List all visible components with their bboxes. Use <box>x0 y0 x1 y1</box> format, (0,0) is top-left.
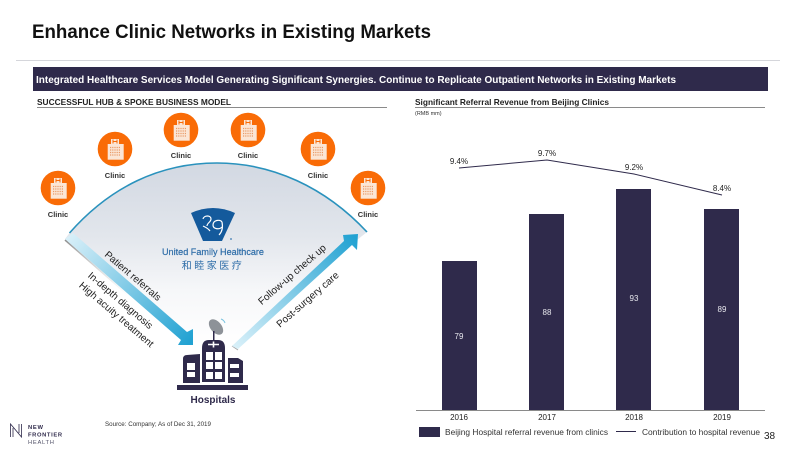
label: post-surgery care: Post-surgery care <box>275 270 342 330</box>
clinic 3: Clinic <box>171 151 191 160</box>
clinic 5: Clinic <box>308 171 328 180</box>
clinic 4: Clinic <box>238 151 258 160</box>
logo: New Frontier Health: NEW <box>28 425 44 431</box>
clinic 1 <box>41 171 75 219</box>
logo: New Frontier Health <box>10 424 63 446</box>
fan sector <box>65 163 367 349</box>
title: Enhance Clinic Networks in Existing Markets <box>32 22 431 43</box>
label: hospitals: Hospitals <box>190 395 236 406</box>
banner: Integrated Healthcare Services Model Generating Significant Synergies. Continue to Replicate Outpatient Networks in Existing Markets <box>36 74 676 86</box>
panel: referral revenue chart <box>415 97 765 437</box>
clinic 4 <box>231 113 265 160</box>
arc <box>70 163 367 233</box>
unit note: (RMB mm) <box>415 111 442 117</box>
line chart: contribution to hospital revenue: 9.7% <box>538 149 556 158</box>
banner <box>33 67 768 91</box>
logo: United Family Healthcare <box>162 208 264 272</box>
bar chart: 2018 <box>625 413 643 422</box>
page number: 38 <box>764 431 776 442</box>
line chart: contribution to hospital revenue: 9.2% <box>625 163 643 172</box>
line chart: contribution to hospital revenue: 8.4% <box>713 184 731 193</box>
logo: New Frontier Health: HEALTH <box>28 440 55 446</box>
logo: United Family Healthcare: 和睦家医疗 <box>182 259 244 272</box>
bar chart: 79 <box>455 332 464 341</box>
clinic 2 <box>98 132 132 180</box>
bar chart: 2017 <box>538 413 556 422</box>
arrow: patient referrals to hospital <box>65 233 193 345</box>
source note: Source: Company; As of Dec 31, 2019 <box>105 421 211 428</box>
legend: Beijing Hospital referral revenue from clinics <box>445 428 608 437</box>
line chart: contribution to hospital revenue: 9.4% <box>450 157 468 166</box>
clinic 6: Clinic <box>358 210 378 219</box>
bar chart <box>416 189 765 422</box>
label: follow-up check up: Follow-up check up <box>256 242 329 308</box>
heading: hub and spoke: SUCCESSFUL HUB & SPOKE BUSINESS MODEL <box>37 98 231 107</box>
label: high acuity treatment: High acuity treatment <box>76 280 156 350</box>
clinic 3 <box>164 113 198 160</box>
heading: referral revenue: Significant Referral Revenue from Beijing Clinics <box>415 97 609 107</box>
bar chart: 89 <box>718 305 727 314</box>
bar chart: 88 <box>543 308 552 317</box>
legend: Contribution to hospital revenue <box>642 428 761 437</box>
label: patient referrals: Patient referrals <box>102 250 163 304</box>
legend <box>419 427 761 437</box>
panel: hub and spoke model <box>37 98 387 428</box>
arrow: follow-up to clinics <box>232 234 358 350</box>
clinic 1: Clinic <box>48 210 68 219</box>
label: in-depth diagnosis: In-depth diagnosis <box>85 270 155 332</box>
clinic 2: Clinic <box>105 171 125 180</box>
clinic 6 <box>351 171 385 219</box>
bar chart: 93 <box>630 294 639 303</box>
icon: hospital <box>177 317 248 390</box>
line chart: contribution to hospital revenue <box>450 149 731 195</box>
clinic 5 <box>301 132 335 180</box>
logo: New Frontier Health: FRONTIER <box>28 432 63 438</box>
logo: United Family Healthcare: United Family Healthcare <box>162 247 264 258</box>
bar chart: 2016 <box>450 413 468 422</box>
bar chart: 2019 <box>713 413 731 422</box>
